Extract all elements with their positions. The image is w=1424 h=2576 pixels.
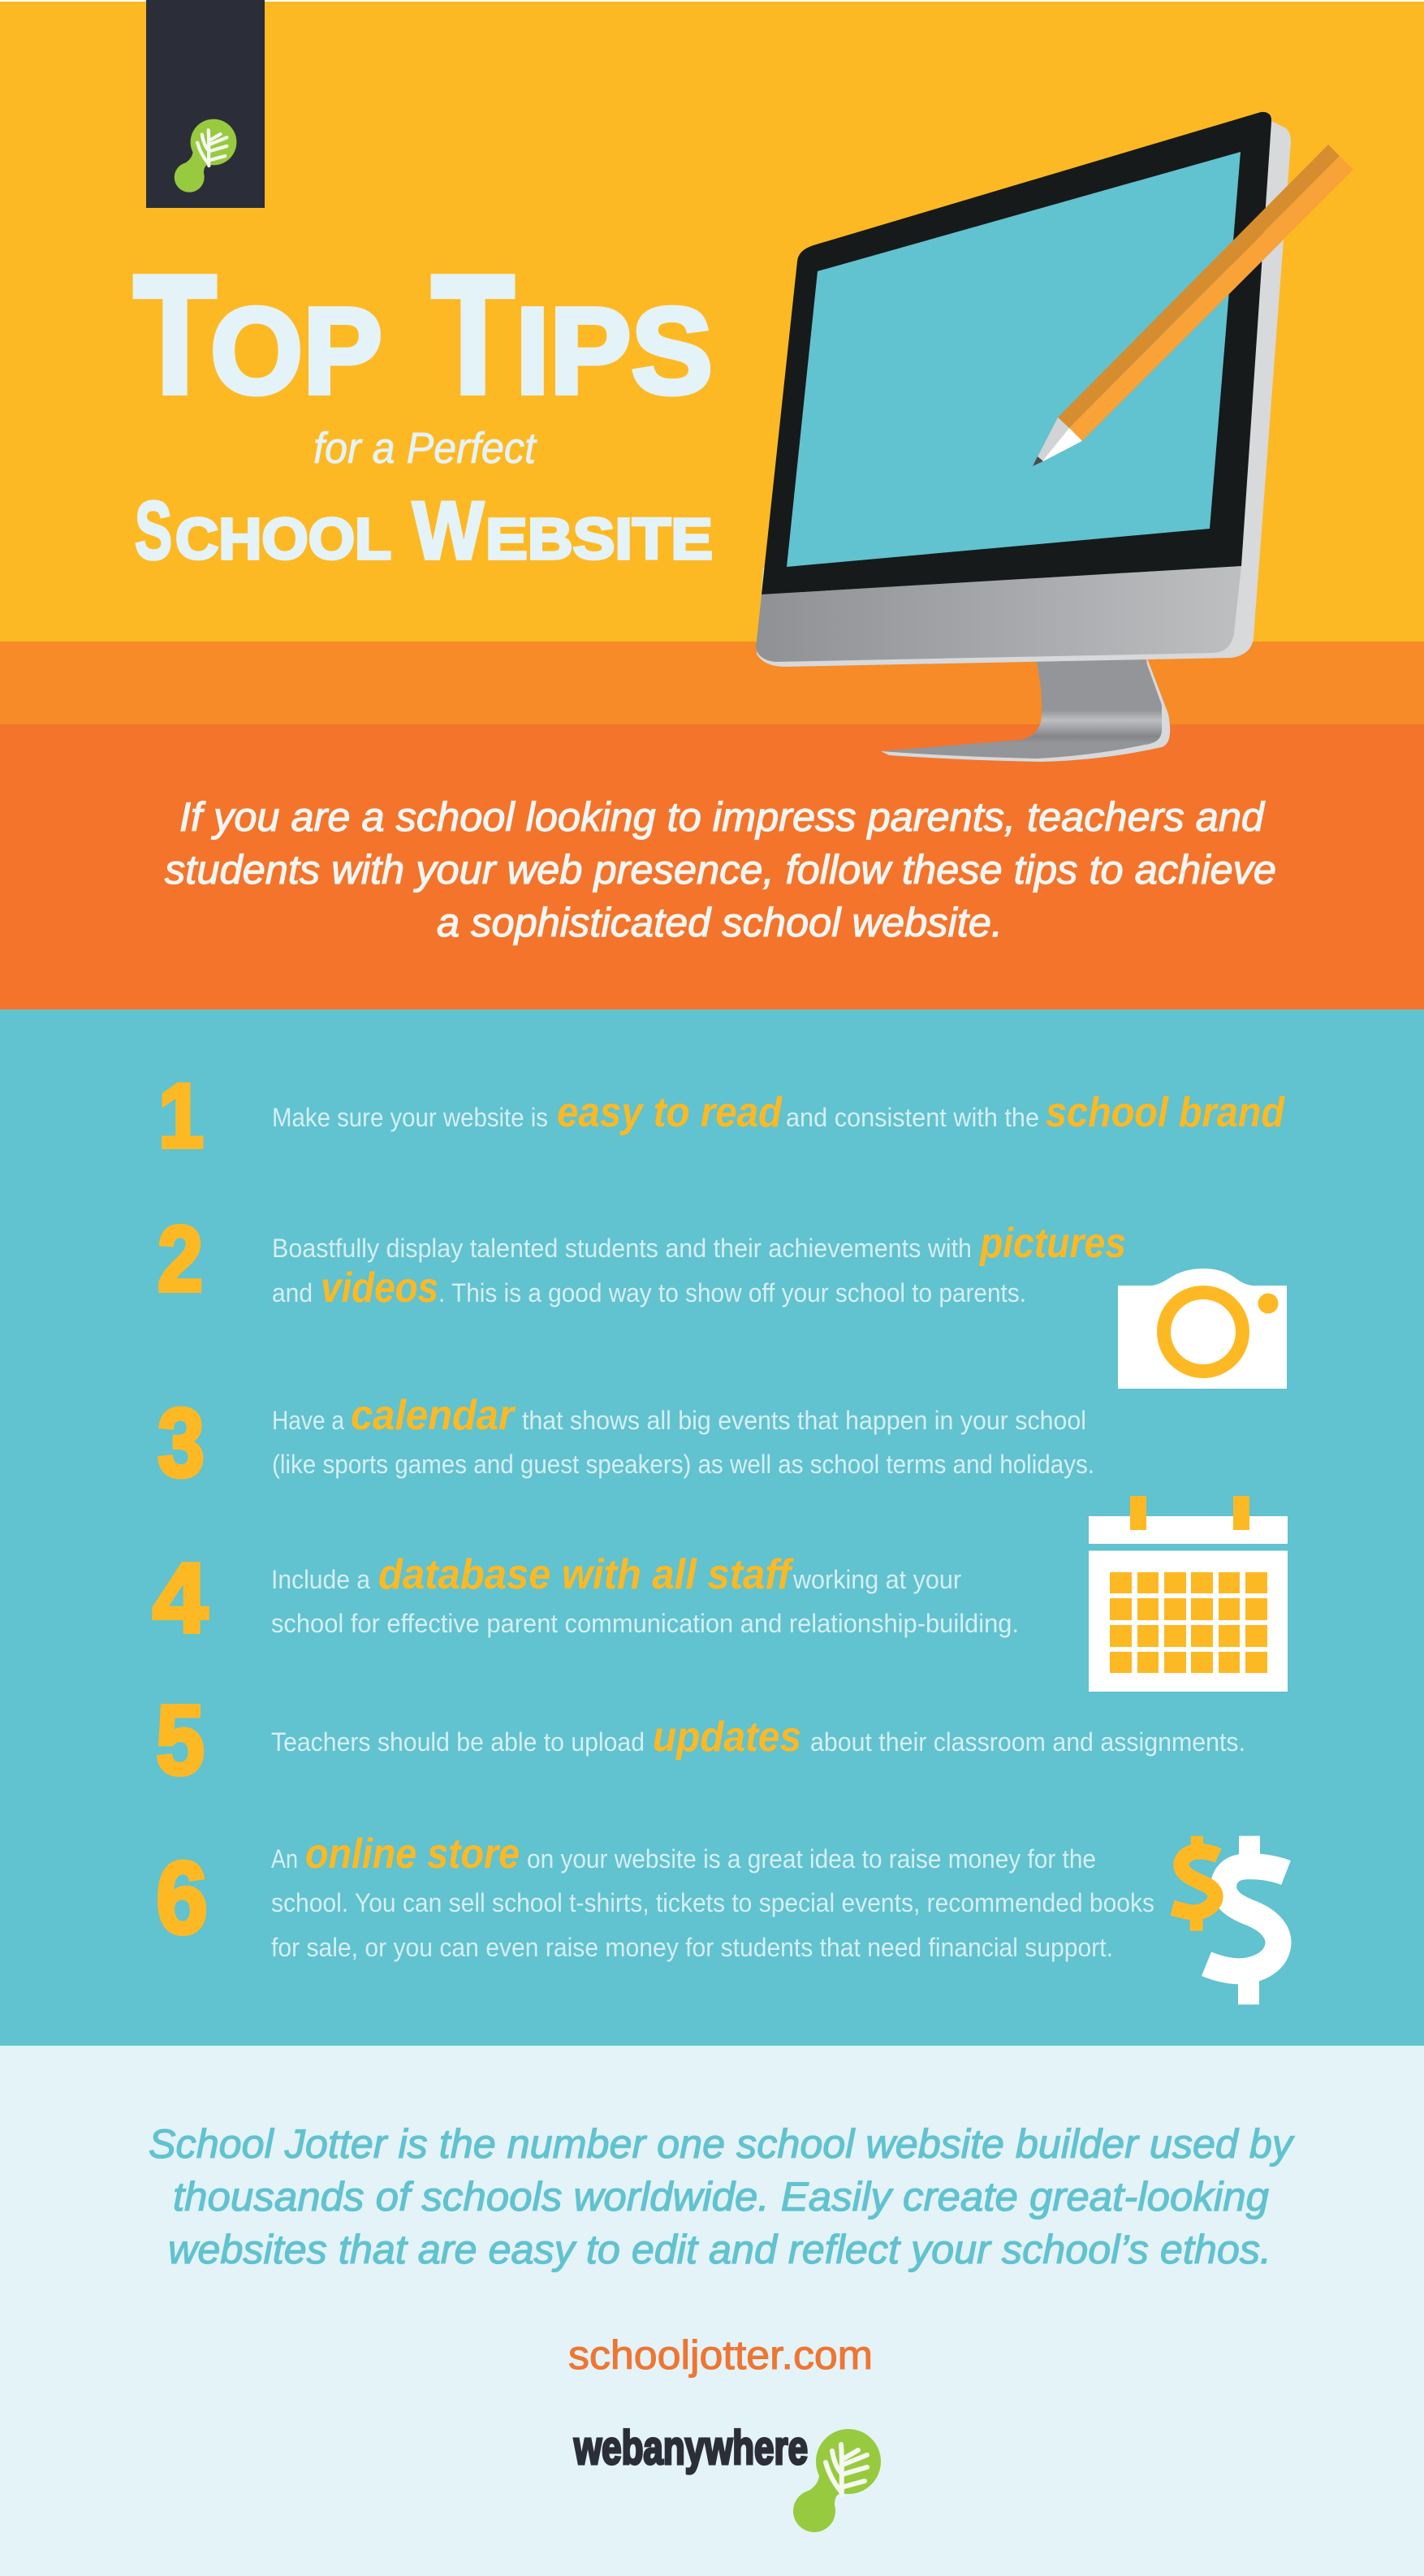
pencil xyxy=(1033,145,1353,466)
white dollar sign xyxy=(1206,1836,1286,2004)
tip 2: . This is a good way to show off your school to parents. xyxy=(438,1278,1026,1307)
tip 3: 3 xyxy=(158,1389,205,1498)
title: T xyxy=(432,241,514,428)
tip 3: Have a xyxy=(272,1406,344,1435)
tip 3 xyxy=(158,1389,1094,1498)
title second line: CHOOL xyxy=(175,508,391,572)
title second line: W xyxy=(412,486,485,577)
intro text: a sophisticated school website. xyxy=(437,900,1003,945)
tip 3: that shows all big events that happen in your school xyxy=(522,1406,1086,1435)
tip 2: Boastfully display talented students and their achievements with xyxy=(272,1234,972,1263)
tip 5: about their classroom and assignments. xyxy=(810,1727,1245,1757)
tip 4: working at your xyxy=(792,1565,961,1594)
tip 6: 6 xyxy=(156,1840,208,1956)
icon: dollar signs xyxy=(1172,1836,1286,2004)
logo mark xyxy=(793,2429,881,2532)
tip 1: Make sure your website is xyxy=(272,1103,548,1132)
calendar date grid xyxy=(1110,1572,1267,1673)
tip 4: Include a xyxy=(271,1565,370,1594)
intro text xyxy=(165,794,1276,945)
title second line xyxy=(135,486,713,577)
tip 2: 2 xyxy=(158,1208,203,1311)
tip 5: Teachers should be able to upload xyxy=(271,1727,645,1757)
footer text xyxy=(149,2121,1295,2272)
icon: camera xyxy=(1118,1269,1287,1389)
tip 3: calendar xyxy=(351,1392,516,1439)
tip 5: updates xyxy=(653,1714,801,1761)
tip 4: database with all staff xyxy=(378,1551,794,1598)
title: T xyxy=(134,241,216,428)
top edge line xyxy=(0,0,1424,2)
monitor back edge xyxy=(757,119,1291,667)
footer text: School Jotter is the number one school website builder used by xyxy=(149,2121,1295,2167)
title second line: EBSITE xyxy=(485,508,713,572)
tip 1 xyxy=(158,1065,1285,1166)
tips panel background xyxy=(0,1009,1424,2046)
subtitle: for a Perfect xyxy=(313,424,537,473)
monitor screen xyxy=(787,152,1241,567)
logo tab xyxy=(146,0,265,208)
tip 4: school for effective parent communication and relationship-building. xyxy=(271,1609,1019,1638)
title xyxy=(134,241,713,577)
tip 6: for sale, or you can even raise money for students that need financial support. xyxy=(271,1933,1113,1962)
tip 1: school brand xyxy=(1046,1089,1285,1136)
monitor stand xyxy=(881,656,1170,762)
tip 6: An xyxy=(271,1844,298,1874)
header background: yellow xyxy=(0,0,1424,642)
tip 1: and consistent with the xyxy=(786,1103,1039,1132)
title: OP xyxy=(210,282,382,419)
tip 1: easy to read xyxy=(557,1089,783,1136)
footer text: websites that are easy to edit and reflect your school’s ethos. xyxy=(168,2227,1271,2272)
tip 2 xyxy=(158,1208,1126,1312)
tip 4 xyxy=(153,1543,1019,1653)
tip 6 xyxy=(156,1830,1154,1962)
tip 4: 4 xyxy=(153,1543,208,1653)
icon: calendar xyxy=(1089,1496,1288,1692)
footer text: thousands of schools worldwide. Easily create great-looking xyxy=(173,2174,1269,2219)
tip 2: and xyxy=(272,1278,313,1307)
tip 3: (like sports games and guest speakers) as well as school terms and holidays. xyxy=(272,1450,1094,1479)
tip 6: online store xyxy=(305,1830,520,1878)
tip 1: 1 xyxy=(158,1065,204,1166)
yellow dollar sign xyxy=(1172,1836,1219,1931)
monitor bezel xyxy=(762,112,1271,594)
icon: computer monitor with pencil xyxy=(756,112,1353,762)
website link: schooljotter.com xyxy=(568,2332,873,2378)
tip 6: school. You can sell school t-shirts, tickets to special events, recommended books xyxy=(271,1888,1154,1917)
header band: orange xyxy=(0,642,1424,724)
tip 6: on your website is a great idea to raise money for the xyxy=(527,1844,1096,1874)
tip 2: pictures xyxy=(978,1220,1126,1267)
tip 5: 5 xyxy=(156,1684,205,1795)
intro panel background xyxy=(0,724,1424,1009)
title: IPS xyxy=(516,282,713,419)
logo wordmark: webanywhere xyxy=(573,2422,808,2474)
footer panel background xyxy=(0,2046,1424,2576)
tip 2: videos xyxy=(321,1264,438,1312)
icon: leaf logo xyxy=(175,119,236,192)
intro text: students with your web presence, follow these tips to achieve xyxy=(165,847,1276,893)
monitor chin xyxy=(756,566,1241,662)
title second line: S xyxy=(135,486,172,577)
tip 5 xyxy=(156,1684,1245,1795)
webanywhere logo xyxy=(573,2422,881,2532)
intro text: If you are a school looking to impress parents, teachers and xyxy=(179,794,1266,840)
